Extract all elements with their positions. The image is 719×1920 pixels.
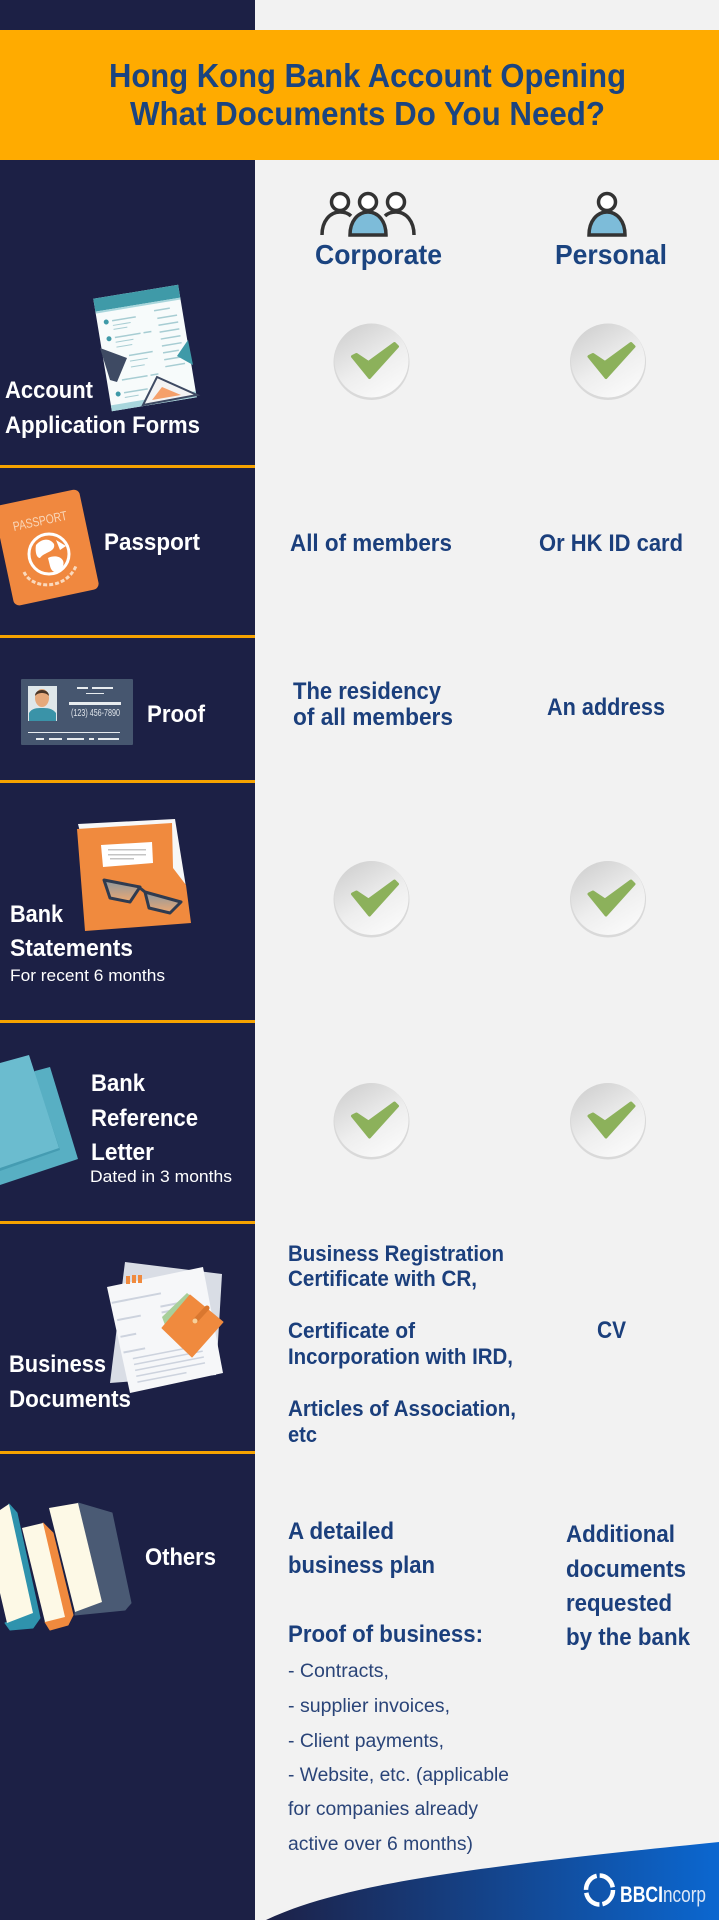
corporate list bbox=[288, 1241, 516, 1447]
row: account application forms bbox=[5, 285, 646, 439]
check corporate bbox=[334, 324, 410, 400]
proof of business: - Contracts, bbox=[288, 1661, 389, 1682]
column header: personal bbox=[555, 194, 667, 270]
label: Business bbox=[9, 1351, 106, 1378]
title line 2: What Documents Do You Need? bbox=[130, 95, 605, 132]
personal text: Or HK ID card bbox=[539, 530, 683, 557]
icon: three people bbox=[322, 194, 414, 235]
personal text bbox=[566, 1521, 691, 1651]
corporate business plan: A detailed bbox=[288, 1518, 394, 1545]
label: Letter bbox=[91, 1139, 154, 1166]
label: Reference bbox=[91, 1105, 198, 1132]
personal text: Additional bbox=[566, 1521, 675, 1548]
icon: passport bbox=[0, 489, 100, 606]
corporate list: Certificate with CR, bbox=[288, 1266, 477, 1291]
title banner bbox=[0, 30, 719, 160]
label: Others bbox=[145, 1544, 216, 1571]
corporate list: Business Registration bbox=[288, 1241, 504, 1266]
proof of business: - Website, etc. (applicable bbox=[288, 1765, 509, 1786]
corporate label: Corporate bbox=[315, 239, 442, 270]
icon: id card bbox=[21, 679, 133, 745]
title line 1: Hong Kong Bank Account Opening bbox=[109, 57, 626, 94]
label: Account bbox=[5, 377, 93, 404]
row: passport bbox=[0, 489, 683, 606]
personal text: requested bbox=[566, 1590, 672, 1617]
personal text: documents bbox=[566, 1556, 686, 1583]
sublabel: Dated in 3 months bbox=[90, 1168, 232, 1186]
icon: passport: PASSPORT bbox=[12, 508, 68, 534]
corporate text: of all members bbox=[293, 704, 453, 731]
personal text: CV bbox=[597, 1317, 626, 1344]
label: Bank bbox=[10, 901, 64, 928]
icon: form document bbox=[93, 285, 197, 411]
proof of business: - supplier invoices, bbox=[288, 1696, 450, 1717]
row: business documents bbox=[9, 1241, 626, 1447]
check personal bbox=[570, 1083, 646, 1160]
icon: person bbox=[589, 194, 625, 235]
personal text: by the bank bbox=[566, 1624, 691, 1651]
icon: folder and glasses bbox=[77, 819, 191, 931]
check personal bbox=[570, 861, 646, 938]
icon: teal letters bbox=[0, 1055, 78, 1185]
sublabel: For recent 6 months bbox=[10, 967, 165, 985]
icon: books bbox=[0, 1503, 131, 1630]
proof of business: Proof of business: bbox=[288, 1621, 483, 1648]
logo: BBCIncorp bbox=[586, 1876, 706, 1907]
logo: BBCIncorp: ncorp bbox=[663, 1882, 706, 1907]
personal text: An address bbox=[547, 694, 665, 721]
label: Application Forms bbox=[5, 412, 200, 439]
bottom swoosh bbox=[266, 1842, 719, 1920]
label: Bank bbox=[91, 1070, 146, 1097]
row: proof bbox=[21, 678, 665, 745]
row: bank statements bbox=[10, 819, 646, 985]
corporate list: Certificate of bbox=[288, 1318, 416, 1343]
personal label: Personal bbox=[555, 239, 667, 270]
proof of business bbox=[288, 1621, 509, 1855]
icon: documents and wallet bbox=[107, 1262, 223, 1393]
column header: corporate bbox=[315, 194, 442, 270]
proof of business: - Client payments, bbox=[288, 1731, 444, 1752]
corporate list: Articles of Association, bbox=[288, 1396, 516, 1421]
proof of business: for companies already bbox=[288, 1799, 478, 1820]
corporate list: etc bbox=[288, 1422, 317, 1447]
label: Documents bbox=[9, 1386, 131, 1413]
row: others bbox=[0, 1503, 691, 1855]
left navy panel bbox=[0, 0, 255, 1920]
label: Proof bbox=[147, 701, 206, 728]
check corporate bbox=[334, 861, 410, 938]
corporate business plan: business plan bbox=[288, 1552, 435, 1579]
row: bank reference letter bbox=[0, 1055, 646, 1186]
check corporate bbox=[334, 1083, 410, 1160]
corporate business plan bbox=[288, 1518, 435, 1579]
corporate list: Incorporation with IRD, bbox=[288, 1344, 513, 1369]
label: Passport bbox=[104, 529, 200, 556]
corporate text: The residency bbox=[293, 678, 442, 705]
check personal bbox=[570, 324, 646, 400]
proof of business: active over 6 months) bbox=[288, 1834, 473, 1855]
logo: BBCIncorp: BBCI bbox=[620, 1882, 663, 1907]
icon: id card: (123) 456-7890 bbox=[71, 708, 120, 719]
label: Statements bbox=[10, 935, 133, 962]
corporate text: All of members bbox=[290, 530, 452, 557]
